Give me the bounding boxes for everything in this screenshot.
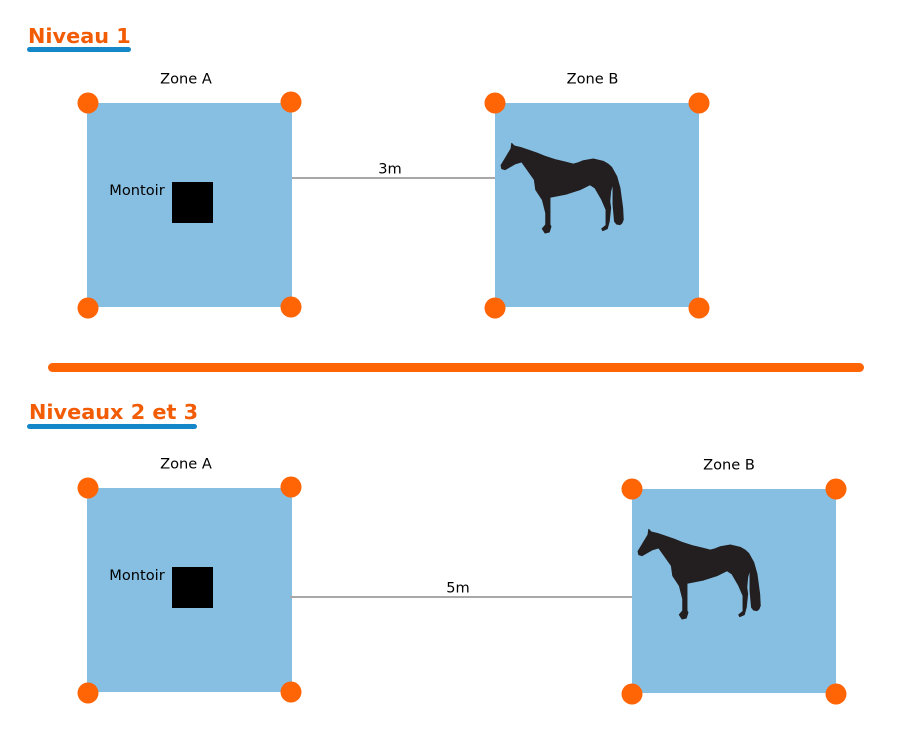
heading: Niveau 1: Niveau 1 [28, 24, 131, 48]
panel: level 1 zone A: Zone A [160, 70, 212, 88]
panel: level 2 zone B [622, 456, 846, 704]
panel: level 1 zone B: Zone B [567, 70, 618, 88]
divider bar [48, 363, 864, 372]
connector: 5m: 5m [446, 580, 470, 596]
panel: level 2 zone A: Zone A [160, 456, 212, 472]
panel: level 2 zone B: Zone B [703, 456, 755, 474]
connector: 3m: 3m [378, 160, 402, 178]
heading: Niveaux 2 et 3: Niveaux 2 et 3 [29, 400, 198, 424]
panel: level 2 zone A: Montoir [109, 567, 165, 584]
panel: level 1 zone A [78, 70, 302, 318]
panel: level 2 zone A [78, 456, 302, 704]
panel: level 1 zone A: Montoir [109, 182, 165, 199]
panel: level 1 zone B [484, 70, 710, 318]
